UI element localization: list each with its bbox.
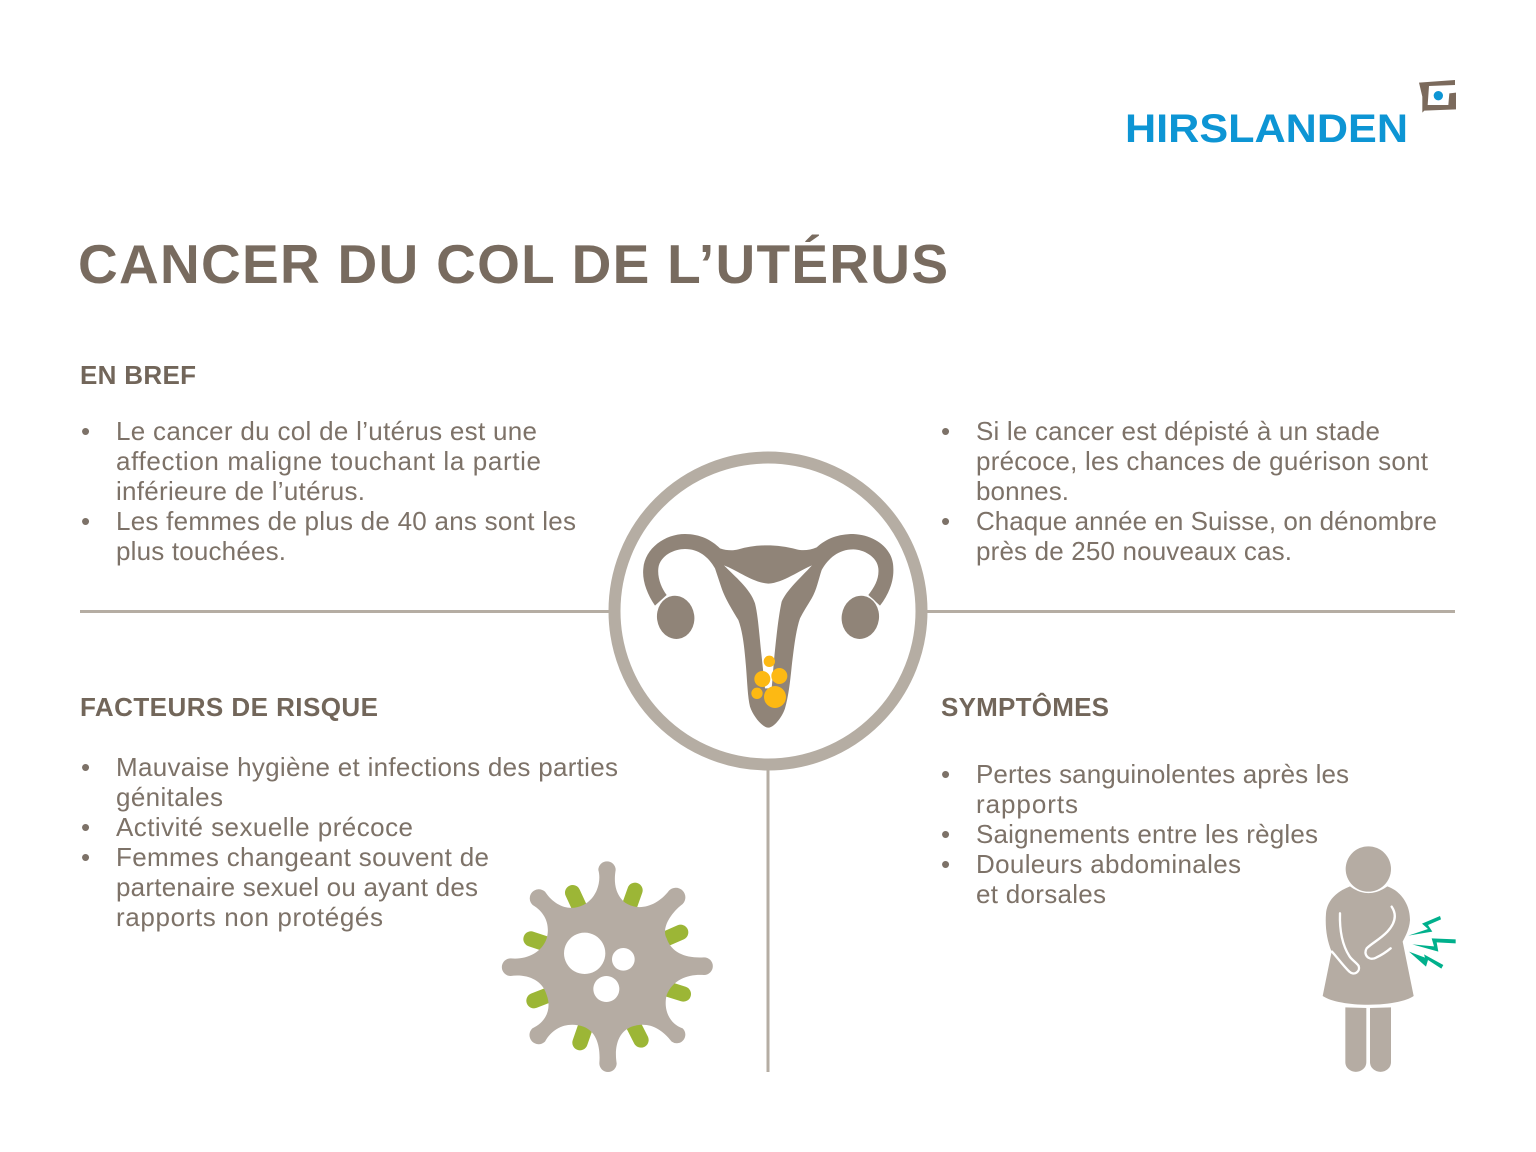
bullet list: en bref left: • — [81, 416, 90, 446]
icon: woman with abdominal pain — [1323, 846, 1456, 1072]
bullet list: symptoms: Douleurs abdominales — [976, 849, 1241, 879]
panel: facteurs de risque — [80, 692, 618, 932]
bullet list: risk factors: rapports non protégés — [116, 902, 383, 932]
heading: symptômes: SYMPTÔMES — [941, 692, 1109, 722]
divider: horizontal right — [925, 610, 1455, 613]
bullet list: symptoms: • — [941, 849, 950, 879]
bullet list: risk factors: Mauvaise hygiène et infections des parties — [116, 752, 618, 782]
heading: en bref: EN BREF — [80, 360, 196, 390]
bullet list: en bref left: Les femmes de plus de 40 ans sont les — [116, 506, 576, 536]
panel: en bref right: • — [941, 506, 950, 536]
divider: horizontal left — [80, 610, 612, 613]
bullet list: symptoms — [941, 759, 1349, 909]
bullet list: symptoms: • — [941, 759, 950, 789]
bullet list: en bref left: • — [81, 506, 90, 536]
logo mark — [1419, 80, 1456, 113]
panel: en bref left — [80, 360, 576, 566]
bullet list: en bref left: plus touchées. — [116, 536, 286, 566]
bullet list: risk factors — [81, 752, 618, 932]
bullet list: risk factors: • — [81, 812, 90, 842]
bullet list: risk factors: Femmes changeant souvent de — [116, 842, 489, 872]
bullet list: en bref left: Le cancer du col de l’utérus est une — [116, 416, 537, 446]
bullet list: symptoms: • — [941, 819, 950, 849]
bullet list: risk factors: • — [81, 752, 90, 782]
panel: en bref right: • — [941, 416, 950, 446]
panel: en bref right: précoce, les chances de guérison sont — [976, 446, 1429, 476]
panel: en bref right: Chaque année en Suisse, on dénombre — [976, 506, 1437, 536]
logo wordmark: HIRSLANDEN — [1125, 107, 1408, 151]
figure — [1323, 846, 1414, 1072]
bullet list: symptoms: Pertes sanguinolentes après les — [976, 759, 1349, 789]
bullet list: symptoms: et dorsales — [976, 879, 1106, 909]
divider: vertical — [766, 768, 770, 1072]
bullet list: risk factors: partenaire sexuel ou ayant des — [116, 872, 478, 902]
bullet list: en bref left: inférieure de l’utérus. — [116, 476, 365, 506]
bullet list: symptoms: rapports — [976, 789, 1078, 819]
panel: symptômes — [941, 692, 1349, 909]
panel: en bref right: bonnes. — [976, 476, 1069, 506]
bullet list: en bref left — [81, 416, 576, 566]
bullet list: risk factors: • — [81, 842, 90, 872]
bullet list: en bref left: affection maligne touchant la partie — [116, 446, 541, 476]
heading: facteurs de risque: FACTEURS DE RISQUE — [80, 692, 378, 722]
bullet list: risk factors: génitales — [116, 782, 223, 812]
pain bolts — [1408, 916, 1456, 969]
panel: en bref right — [941, 416, 1437, 566]
logo: Hirslanden — [1125, 80, 1456, 151]
title: CANCER DU COL DE L’UTÉRUS — [78, 233, 948, 295]
icon: uterus in circle — [614, 457, 921, 764]
bullet list: symptoms: Saignements entre les règles — [976, 819, 1318, 849]
panel: en bref right: près de 250 nouveaux cas. — [976, 536, 1292, 566]
panel: en bref right: Si le cancer est dépisté à un stade — [976, 416, 1380, 446]
bullet list: risk factors: Activité sexuelle précoce — [116, 812, 413, 842]
icon: virus — [502, 861, 713, 1072]
